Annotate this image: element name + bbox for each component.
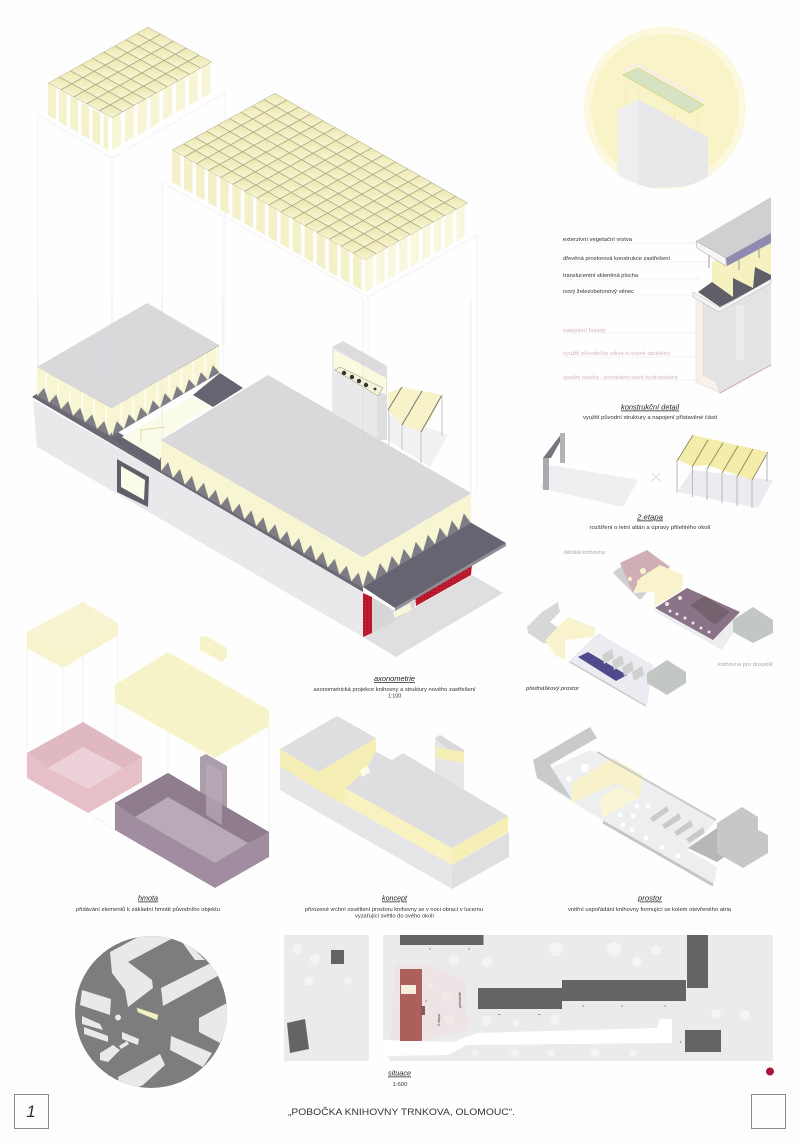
site plan right xyxy=(383,935,774,1088)
yellow mass tower xyxy=(200,636,227,662)
labels: nový železobetonový věnec xyxy=(563,289,634,295)
caption: situace xyxy=(388,1068,411,1078)
ground xyxy=(363,575,503,657)
small tower with skylight xyxy=(332,341,387,440)
space diagram xyxy=(533,727,768,913)
window frame xyxy=(117,459,149,507)
holes xyxy=(566,764,680,858)
gray roofs xyxy=(280,716,376,772)
slab xyxy=(693,279,771,312)
construction detail section xyxy=(563,197,771,421)
wooden grid small xyxy=(48,27,212,150)
caption: konstrukční detail xyxy=(621,402,679,412)
main block curtain xyxy=(161,440,471,588)
road xyxy=(383,1019,672,1061)
caption xyxy=(583,402,717,421)
terrace dark slab xyxy=(363,522,506,608)
detail circle xyxy=(584,27,746,195)
pink mass xyxy=(27,722,142,813)
north mark xyxy=(766,1068,774,1076)
caption: využití původní struktury a napojení přístavěné části xyxy=(583,414,717,421)
yellow mass large xyxy=(115,652,269,758)
trees xyxy=(427,942,750,1058)
lower floor plan xyxy=(525,602,686,706)
entrance marks xyxy=(426,948,681,1042)
yellow mass small xyxy=(27,602,118,668)
caption: axonometrie: 1:100 xyxy=(388,694,401,700)
labels xyxy=(563,237,678,381)
roof xyxy=(696,197,771,258)
caption: přidávání elementů k základní hmotě původního objektu xyxy=(76,906,220,913)
mass diagram xyxy=(27,602,269,913)
gray block xyxy=(688,807,768,868)
frame only xyxy=(540,433,638,507)
sheet number box: 1 xyxy=(26,1102,36,1121)
plan notes: parkoviště xyxy=(458,992,462,1008)
empty box xyxy=(752,1094,786,1128)
yellow left band xyxy=(280,738,376,805)
lower floor plan: přednáškový prostor xyxy=(525,686,579,692)
purple mass xyxy=(115,754,269,888)
gray base xyxy=(280,766,452,889)
caption: axonometrie: axonometrie xyxy=(374,674,415,683)
finished pergola xyxy=(677,435,773,508)
red brick wall xyxy=(363,565,472,637)
caption xyxy=(305,894,483,920)
caption: přirozené vrchní osvětlení prostoru knihovny se v noci obrací v lucernu xyxy=(305,907,483,913)
upper floor plan xyxy=(564,550,773,668)
caption: 1:600 xyxy=(392,1082,408,1088)
caption: rozšíření o letní altán a úpravy přilehlého okolí xyxy=(590,525,711,531)
tower xyxy=(435,735,464,795)
section wall xyxy=(696,283,771,393)
caption xyxy=(590,512,711,531)
rear dark terrace xyxy=(193,373,243,407)
site plan right: 2.etapa xyxy=(437,1014,441,1026)
wooden grid large xyxy=(172,93,468,292)
left block roof xyxy=(37,303,219,408)
caption: vnitřní uspořádání knihovny formující se kolem otevřeného atria xyxy=(568,907,731,913)
site plan left xyxy=(284,935,369,1061)
neighbouring buildings xyxy=(400,935,721,1052)
caption xyxy=(388,1068,411,1088)
library marker xyxy=(137,1008,158,1020)
site circle map xyxy=(75,936,227,1088)
dark floor with teeth xyxy=(698,267,771,307)
floor plan axonometrics xyxy=(525,550,773,706)
caption: koncept xyxy=(382,894,408,902)
labels: translucentní skleněná plocha xyxy=(563,273,638,279)
perimeter slab xyxy=(32,388,363,592)
sheet number box xyxy=(14,1094,48,1128)
shelves xyxy=(650,806,717,850)
labels: spodní stavba - provedení nové hydroizolace xyxy=(563,375,678,381)
glass skylight xyxy=(620,62,706,103)
caption: vyzařující světlo do svého okolí xyxy=(355,914,435,920)
library footprint xyxy=(400,969,425,1041)
upper floor plan: knihovna pro dospělé xyxy=(718,662,773,668)
atrium xyxy=(120,397,209,463)
cross mark xyxy=(652,473,660,481)
guide lines xyxy=(38,93,477,557)
stage 2 pergola diagrams xyxy=(540,433,773,531)
labels: dřevěná prostorová konstrukce zastřešení xyxy=(563,256,671,262)
axonometric: roof structure grids and main building xyxy=(32,27,506,657)
yellow light core xyxy=(572,758,643,818)
left block curtain xyxy=(37,345,219,437)
concept diagram xyxy=(280,716,509,920)
labels: zateplení fasády xyxy=(563,328,606,334)
caption: axonometrie xyxy=(314,674,476,700)
guide lines xyxy=(27,635,269,888)
pergola xyxy=(388,387,448,467)
caption xyxy=(76,894,220,913)
labels: využití původního zdiva a nosné struktury xyxy=(563,350,670,357)
front guide lines xyxy=(38,300,471,557)
upper floor plan: dětská knihovna xyxy=(564,550,605,556)
floor xyxy=(553,750,717,887)
yellow glazing xyxy=(712,235,771,300)
leader lines xyxy=(563,243,710,380)
caption xyxy=(568,894,731,913)
caption: hmota xyxy=(138,894,158,902)
main roof xyxy=(161,375,471,557)
end wedge xyxy=(533,727,597,800)
long wall xyxy=(33,400,363,637)
caption: 2.etapa xyxy=(636,512,663,522)
project title: „POBOČKA KNIHOVNY TRNKOVA, OLOMOUC“. xyxy=(288,1107,515,1118)
labels: exterzivní vegetační vrstva xyxy=(563,237,632,243)
caption: prostor xyxy=(637,894,663,902)
caption: axonometrie: axonometrická projekce knihovny a struktury nového zastřešení xyxy=(314,687,476,693)
pink area xyxy=(390,965,468,1040)
long edge xyxy=(603,822,713,885)
